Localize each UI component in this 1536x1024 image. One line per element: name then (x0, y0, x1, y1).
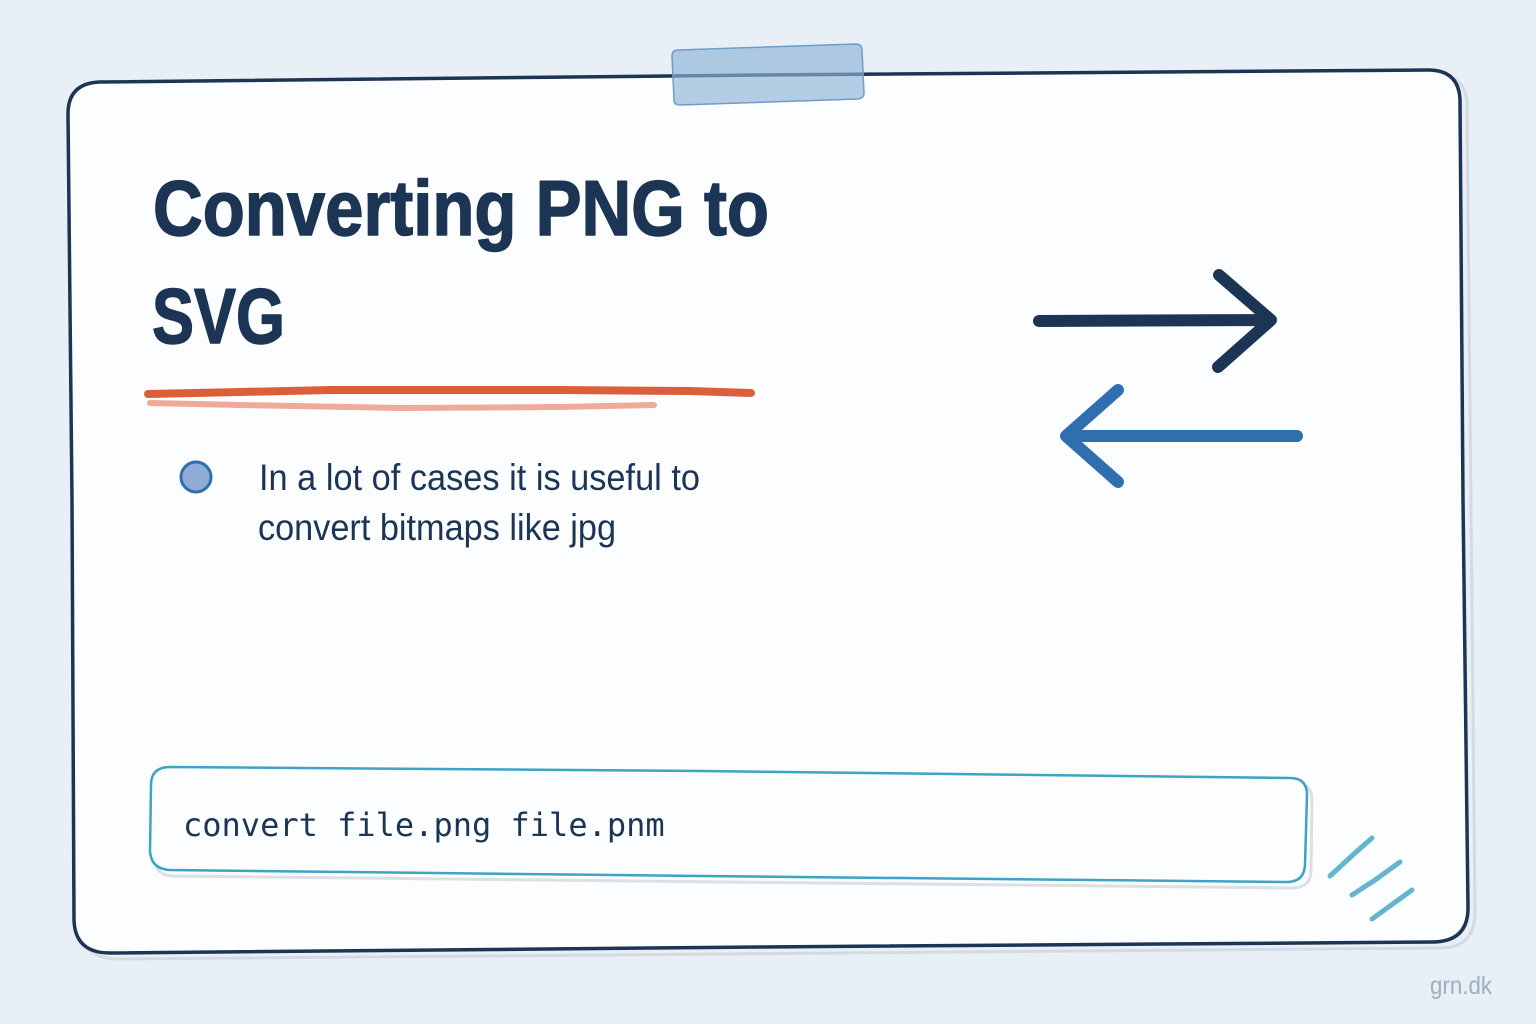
decorative hatch marks (1330, 838, 1412, 919)
title: Converting PNG to (153, 164, 769, 252)
watermark: grn.dk (1430, 972, 1492, 1000)
panel: main card (68, 70, 1475, 959)
code text: convert file.png file.pnm (183, 806, 665, 844)
icon: conversion arrows (1039, 275, 1297, 482)
bullet text: In a lot of cases it is useful to (259, 457, 700, 498)
arrow: right (1039, 275, 1271, 367)
bullet marker (181, 462, 211, 492)
bullet text: convert bitmaps like jpg (258, 507, 616, 548)
tape (672, 44, 864, 105)
title: SVG (152, 272, 285, 360)
arrow: left (1066, 390, 1297, 482)
title underline (148, 390, 751, 408)
code box (150, 767, 1312, 888)
title (152, 164, 769, 360)
bullet text (258, 457, 700, 548)
